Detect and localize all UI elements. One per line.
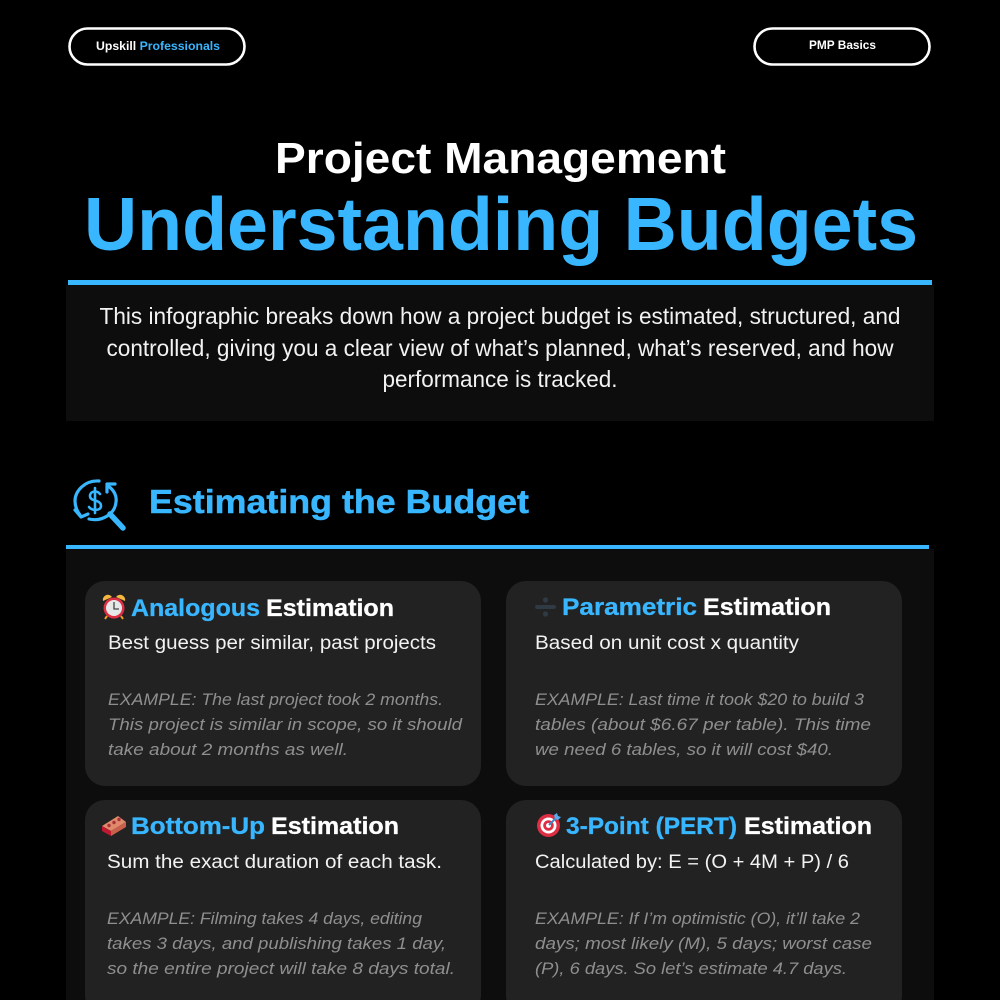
card: 3-point PERT estimation — [506, 800, 902, 1000]
card example: EXAMPLE: If I’m optimistic (O), it’ll take 2 — [535, 909, 861, 928]
card description: Calculated by: E = (O + 4M + P) / 6 — [535, 852, 849, 873]
card example — [107, 909, 455, 978]
brand pill: Upskill Professionals — [96, 39, 220, 53]
panel: estimation methods — [66, 549, 934, 1000]
intro panel: This infographic breaks down how a project budget is estimated, structured, and — [100, 303, 900, 329]
card example — [108, 690, 463, 759]
section heading: Estimating the Budget — [149, 483, 529, 520]
card example — [535, 909, 872, 978]
section rule — [66, 545, 929, 549]
card title: Estimation — [266, 595, 394, 622]
icon: brick — [102, 816, 126, 836]
card description: Best guess per similar, past projects — [108, 633, 436, 654]
card example: so the entire project will take 8 days total. — [107, 959, 455, 978]
card title: Estimation — [703, 594, 831, 621]
card example: EXAMPLE: Last time it took $20 to build 3 — [535, 690, 865, 709]
title: Understanding Budgets — [84, 182, 918, 266]
topic pill — [754, 28, 930, 64]
title: Project Management — [275, 134, 726, 183]
card title: Estimation — [271, 813, 399, 840]
title rule — [68, 280, 932, 285]
icon: money search with circular arrows — [75, 481, 123, 528]
topic pill: PMP Basics — [809, 38, 876, 52]
icon: alarm clock — [103, 595, 125, 619]
card title: Analogous — [131, 595, 260, 622]
intro panel: performance is tracked. — [382, 366, 618, 392]
icon: division sign — [535, 597, 556, 617]
intro panel: controlled, giving you a clear view of what’s planned, what’s reserved, and how — [106, 335, 894, 361]
card example: EXAMPLE: The last project took 2 months. — [108, 690, 443, 709]
card: parametric estimation — [506, 581, 902, 786]
card description: Sum the exact duration of each task. — [107, 852, 442, 873]
card: bottom-up estimation — [85, 800, 481, 1000]
card example: takes 3 days, and publishing takes 1 day, — [107, 934, 446, 953]
card example — [535, 690, 871, 759]
card title: Bottom-Up — [131, 813, 265, 840]
card: analogous estimation — [85, 581, 481, 786]
title — [84, 134, 918, 266]
icon: bullseye target — [537, 813, 561, 837]
card example: This project is similar in scope, so it should — [108, 715, 463, 734]
card example: take about 2 months as well. — [108, 740, 348, 759]
card title: Estimation — [744, 813, 872, 840]
card example: we need 6 tables, so it will cost $40. — [535, 740, 833, 759]
card title: 3-Point (PERT) — [566, 813, 737, 840]
card description: Based on unit cost x quantity — [535, 633, 800, 654]
card example: days; most likely (M), 5 days; worst case — [535, 934, 872, 953]
card example: tables (about $6.67 per table). This time — [535, 715, 871, 734]
card title: Parametric — [562, 594, 697, 621]
card example: EXAMPLE: Filming takes 4 days, editing — [107, 909, 423, 928]
intro panel — [66, 285, 934, 421]
brand pill — [70, 28, 244, 64]
card example: (P), 6 days. So let’s estimate 4.7 days. — [535, 959, 847, 978]
